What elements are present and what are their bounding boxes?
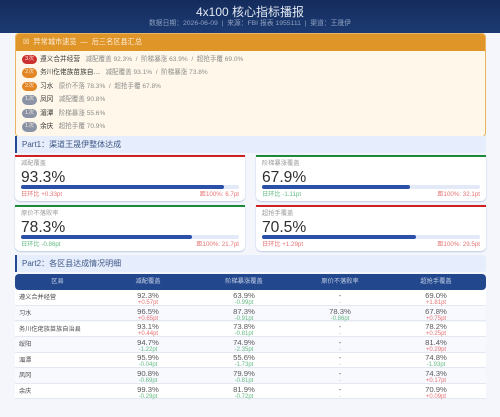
table header: 原价不落败率 — [321, 278, 359, 285]
alert row 2: 务川仡佬族苗族自… 减配覆盖 93.1% / 阶梯暴涨 73.8% — [40, 69, 208, 76]
row: 湄潭: 55.6% — [233, 353, 255, 362]
card: 原价不落败率: 78.3% — [21, 218, 65, 236]
row: 凤冈: 74.3% — [425, 369, 447, 378]
section heading: part 2: Part2：各区县达成情况明细 — [22, 259, 121, 268]
row: 绥阳 — [15, 337, 486, 353]
row: 余庆: - — [339, 385, 341, 394]
row: 余庆: - — [339, 394, 341, 400]
section heading: part 1: Part1：渠道王晟伊整体达成 — [22, 140, 121, 149]
card: 超抢手覆盖: 日环比 +1.29pt — [262, 241, 303, 248]
row: 遵义合并经营: 63.9% — [233, 291, 255, 300]
row: 湄潭 — [15, 353, 486, 368]
card: 减配覆盖: 93.3% — [21, 168, 65, 186]
row: 绥阳: +0.29pt — [426, 347, 446, 353]
row: 凤冈 — [15, 368, 486, 384]
card: 阶梯暴涨覆盖 — [256, 155, 486, 201]
alert row 5 — [22, 109, 106, 118]
row: 遵义合并经营: 遵义合并经营 — [19, 294, 56, 301]
row: 务川仡佬族苗族自治县: 务川仡佬族苗族自治县 — [19, 326, 81, 332]
table header: 超抢手覆盖 — [420, 278, 452, 285]
card: 超抢手覆盖 — [256, 205, 486, 251]
row: 绥阳: - — [339, 347, 341, 353]
card: 阶梯暴涨覆盖: 阶梯暴涨覆盖 — [262, 160, 300, 166]
row: 务川仡佬族苗族自治县: 78.2% — [425, 322, 447, 331]
card: 超抢手覆盖: 距100%: 29.5pt — [437, 241, 480, 248]
row: 余庆: 99.3% — [137, 385, 159, 394]
card: 原价不落败率: 原价不落败率 — [21, 210, 58, 216]
alert row 2 — [22, 68, 208, 78]
row: 绥阳: 74.9% — [233, 338, 255, 347]
row: 余庆: +0.09pt — [426, 394, 446, 400]
row: 务川仡佬族苗族自治县: 93.1% — [137, 322, 159, 331]
card: 原价不落败率 — [15, 205, 245, 251]
table header: 阶梯暴涨覆盖 — [225, 278, 263, 285]
row: 务川仡佬族苗族自治县: 73.8% — [233, 322, 255, 331]
row: 遵义合并经营: +0.57pt — [138, 300, 158, 306]
row: 凤冈: - — [339, 378, 341, 384]
card: 阶梯暴涨覆盖: 距100%: 32.1pt — [437, 191, 480, 198]
table — [15, 274, 486, 400]
section heading: part 2 — [15, 255, 486, 272]
card: 超抢手覆盖: 70.5% — [262, 218, 306, 236]
row: 凤冈: -0.69pt — [139, 378, 157, 384]
alert row 6 — [22, 122, 106, 132]
row: 余庆 — [15, 384, 486, 399]
row: 务川仡佬族苗族自治县: +0.25pt — [426, 331, 446, 337]
row: 凤冈: - — [339, 369, 341, 378]
row: 习水: -0.91pt — [235, 316, 253, 322]
section heading: part 1 — [15, 136, 486, 153]
table header: 减配覆盖 — [136, 278, 160, 285]
row: 务川仡佬族苗族自治县: -0.81pt — [235, 331, 253, 337]
alert row 4 — [22, 95, 106, 105]
row: 遵义合并经营: +1.81pt — [426, 300, 446, 306]
row: 湄潭: - — [339, 353, 341, 362]
row: 遵义合并经营 — [15, 290, 486, 306]
card: 减配覆盖 — [15, 155, 245, 201]
row: 湄潭: -1.93pt — [427, 362, 445, 368]
row: 绥阳: -2.35pt — [235, 347, 253, 353]
row: 余庆: -0.72pt — [235, 394, 253, 400]
table header: 区县 — [51, 278, 64, 285]
row: 湄潭: 95.9% — [137, 353, 159, 362]
row: 凤冈: -0.81pt — [235, 378, 253, 384]
row: 绥阳: 81.4% — [425, 338, 447, 347]
alert heading — [16, 34, 487, 51]
row: 习水: 习水 — [19, 310, 31, 317]
row: 务川仡佬族苗族自治县: +0.44pt — [138, 331, 158, 337]
alert heading: ☒ 异常城市速览 — 后三名区县汇总 — [23, 37, 142, 46]
card: 阶梯暴涨覆盖: 67.9% — [262, 168, 306, 186]
row: 遵义合并经营: - — [339, 300, 341, 306]
card: 减配覆盖: 日环比 +0.33pt — [21, 191, 62, 198]
row: 凤冈: 90.8% — [137, 369, 159, 378]
card: 阶梯暴涨覆盖: 日环比 -1.11pt — [262, 191, 301, 198]
text: 3次 — [25, 56, 34, 62]
alert row 1: 遵义合并经营 减配覆盖 92.3% / 阶梯暴涨 63.9% / 超抢手覆 69.0% — [40, 56, 243, 63]
row: 遵义合并经营: -0.99pt — [235, 300, 253, 306]
panel: alert summary — [15, 33, 486, 137]
row: 余庆: 81.9% — [233, 385, 255, 394]
row: 习水: 87.3% — [233, 307, 255, 316]
row: 凤冈: 79.9% — [233, 369, 255, 378]
row: 余庆: 70.9% — [425, 385, 447, 394]
row: 湄潭: - — [339, 362, 341, 368]
row: 凤冈: +0.17pt — [426, 378, 446, 384]
row: 凤冈: 凤冈 — [19, 372, 31, 379]
row: 习水: +0.75pt — [426, 316, 446, 322]
header banner — [0, 0, 500, 33]
card: 原价不落败率: 距100%: 21.7pt — [196, 241, 239, 248]
row: 绥阳: -1.22pt — [139, 347, 157, 353]
row: 习水 — [15, 306, 486, 321]
row: 习水: 96.5% — [137, 307, 159, 316]
row: 习水: -0.86pt — [331, 316, 349, 322]
alert row 4: 凤冈 减配覆盖 90.8% — [40, 96, 105, 103]
alert row 3: 习水 原价不落 78.3% / 超抢手覆 67.8% — [40, 83, 161, 90]
table header — [15, 274, 486, 290]
text: 1次 — [25, 123, 34, 129]
title: 4x100 核心指标播报 — [196, 5, 304, 19]
row: 绥阳: - — [339, 338, 341, 347]
alert row 5: 湄潭 阶梯暴涨 55.6% — [40, 110, 105, 117]
card: 超抢手覆盖: 超抢手覆盖 — [262, 210, 293, 216]
row: 务川仡佬族苗族自治县 — [15, 322, 486, 337]
row: 遵义合并经营: - — [339, 291, 341, 300]
text: 2次 — [25, 69, 34, 75]
row: 湄潭: -0.04pt — [139, 362, 157, 368]
alert row 3 — [22, 82, 161, 91]
row: 绥阳: 94.7% — [137, 338, 159, 347]
row: 余庆: 余庆 — [19, 388, 31, 395]
card: 减配覆盖: 减配覆盖 — [21, 160, 46, 166]
row: 湄潭: 湄潭 — [19, 357, 31, 364]
row: 遵义合并经营: 92.3% — [137, 291, 159, 300]
row: 习水: 78.3% — [329, 307, 351, 316]
row: 湄潭: -1.73pt — [235, 362, 253, 368]
alert row 6: 余庆 超抢手覆 70.9% — [40, 123, 105, 130]
data source line: 数据日期：2026-06-09 | 来源：FBI 报表 1955111 | 渠道：王晟伊 — [149, 20, 351, 27]
row: 湄潭: 74.8% — [425, 353, 447, 362]
row: 务川仡佬族苗族自治县: - — [339, 322, 341, 331]
row: 绥阳: 绥阳 — [19, 341, 31, 348]
card: 原价不落败率: 日环比 -0.86pt — [21, 241, 61, 248]
row: 习水: 67.8% — [425, 307, 447, 316]
row: 习水: +0.65pt — [138, 316, 158, 322]
card: 减配覆盖: 距100%: 6.7pt — [200, 191, 239, 198]
text: 1次 — [25, 96, 34, 102]
text: 1次 — [25, 110, 34, 116]
row: 遵义合并经营: 69.0% — [425, 291, 447, 300]
row: 务川仡佬族苗族自治县: - — [339, 331, 341, 337]
text: 2次 — [25, 83, 34, 89]
row: 余庆: -0.29pt — [139, 394, 157, 400]
